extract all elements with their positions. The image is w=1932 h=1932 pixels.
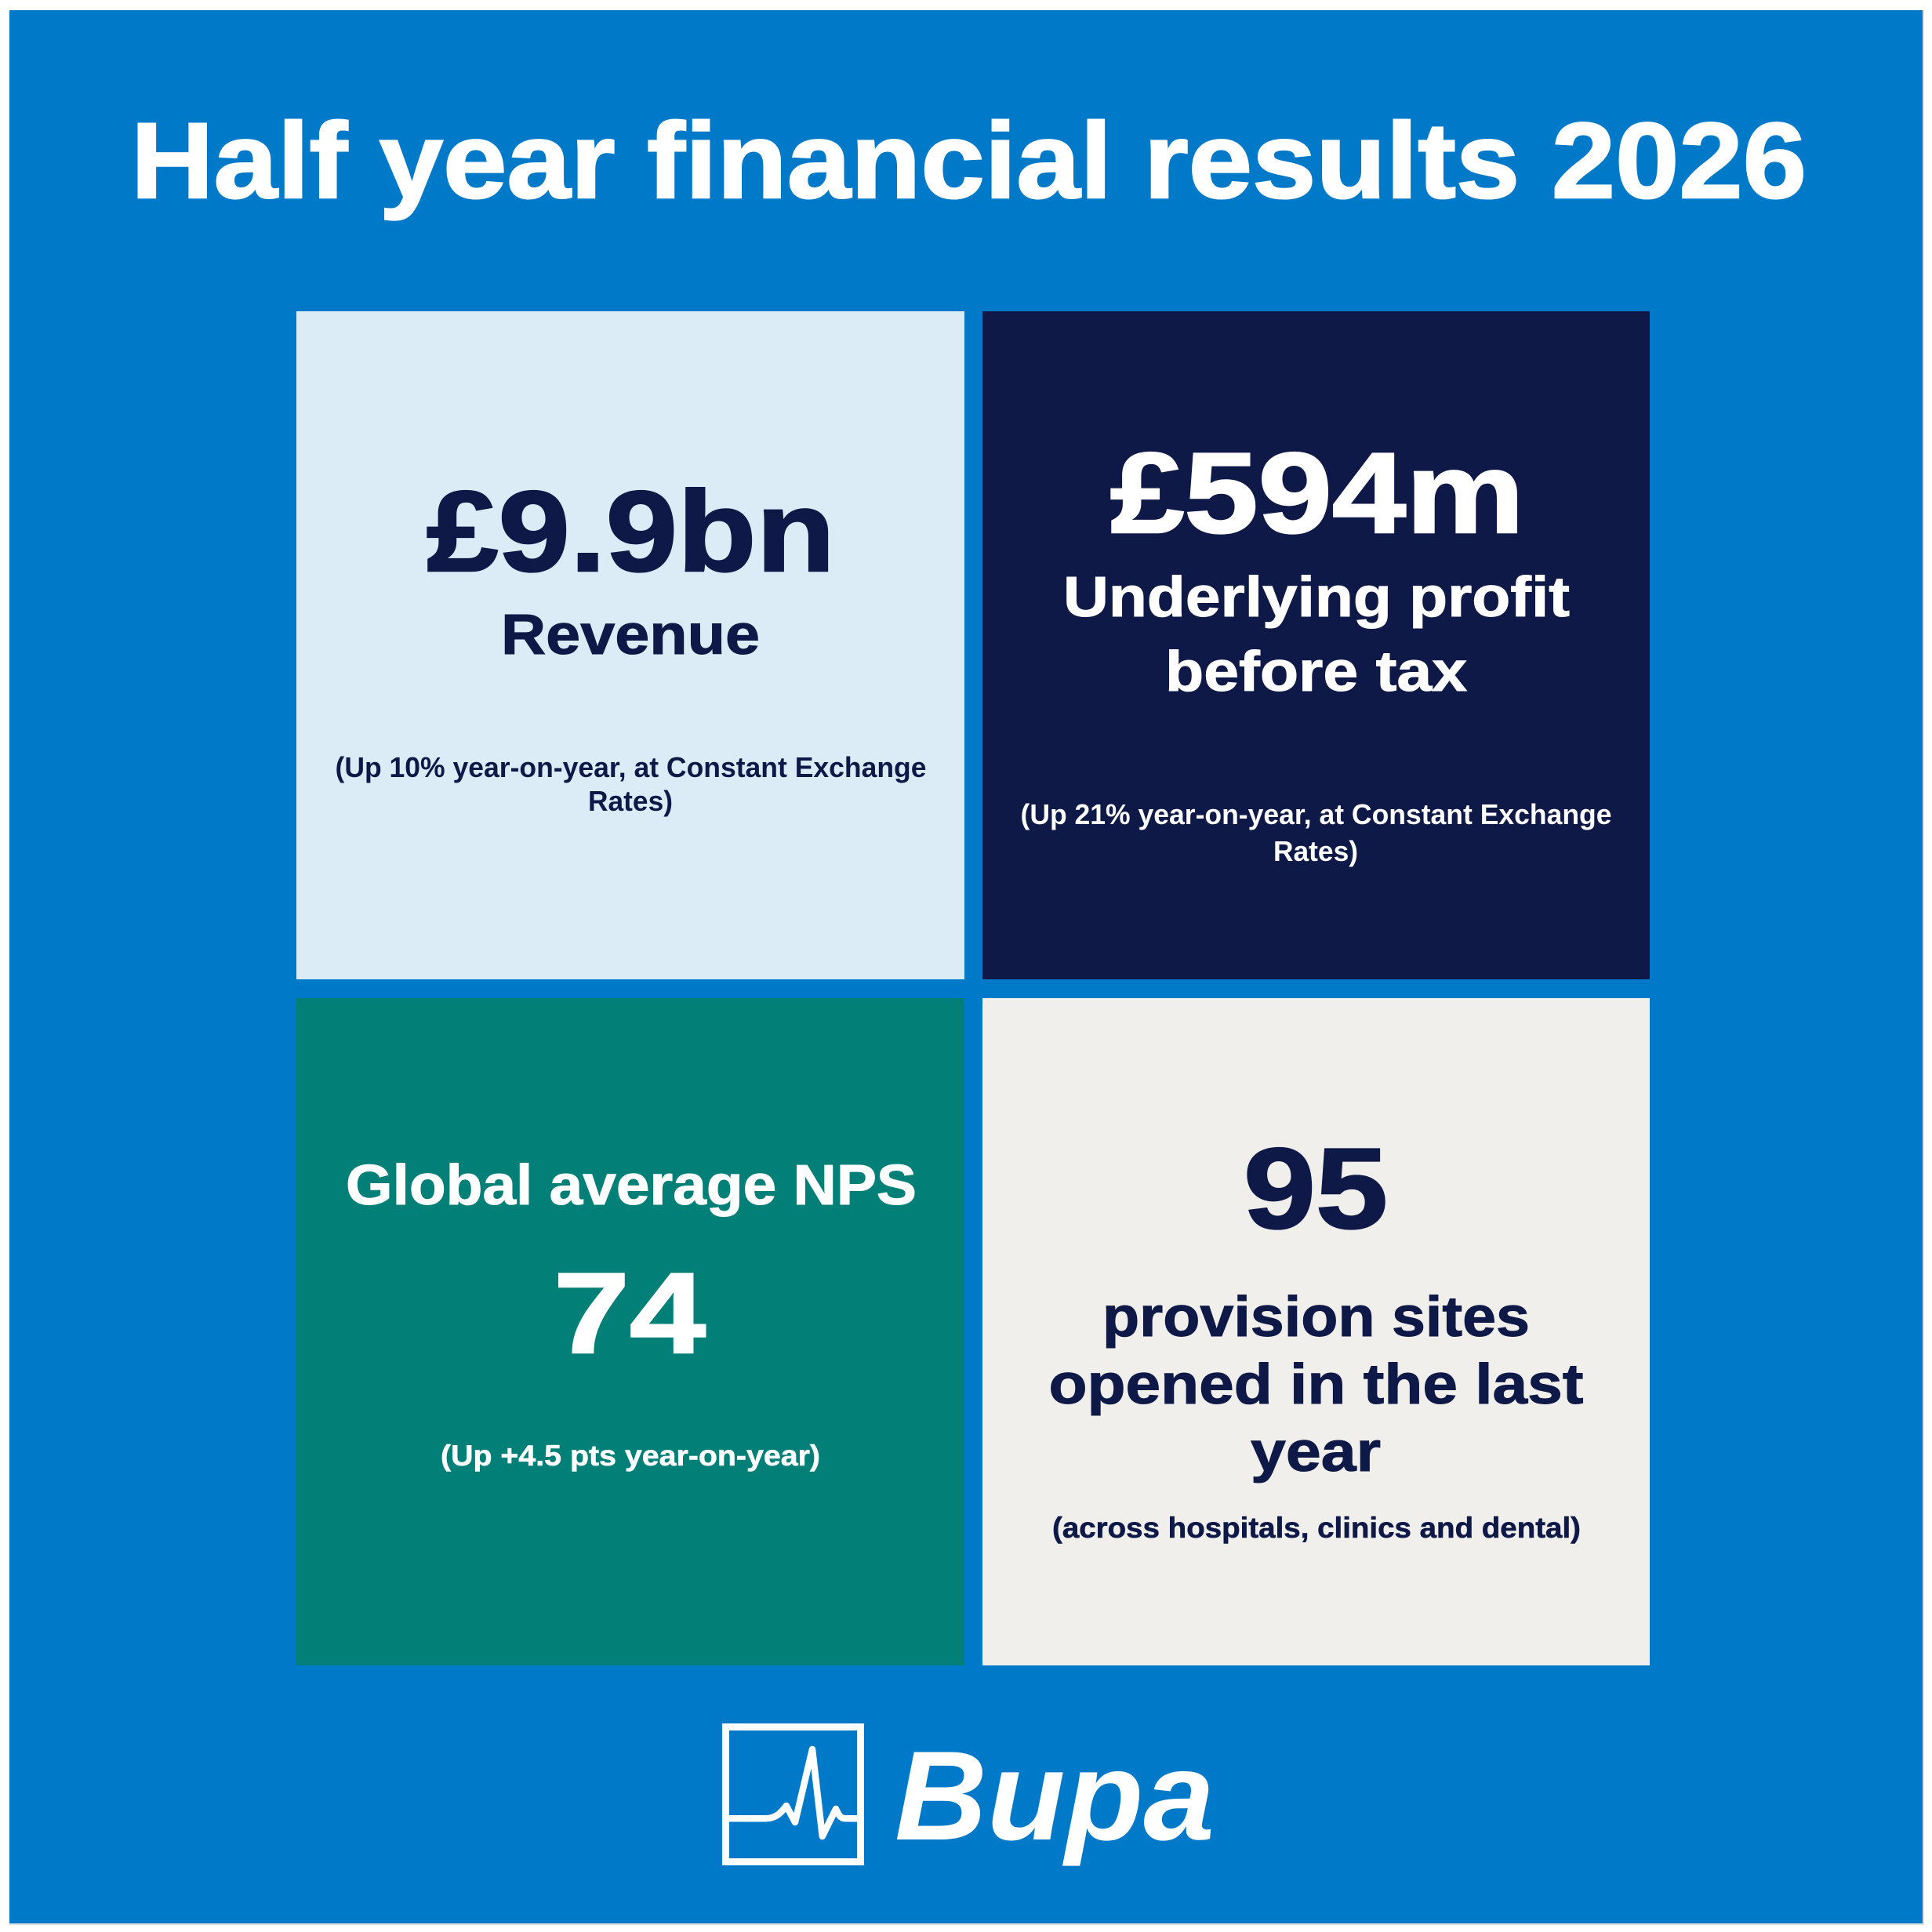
profit figure: £594m [1110,429,1524,557]
revenue note: (Up 10% year-on-year, at Constant Exchange [336,751,927,783]
revenue figure: £9.9bn [427,467,835,595]
NPS label: Global average NPS [346,1154,917,1217]
panel: underlying profit [982,311,1650,979]
revenue note [336,751,927,817]
logo: Bupa [726,1725,1215,1867]
sites label: opened in the last [1049,1353,1584,1416]
title: Half year financial results 2026 [131,101,1807,221]
profit note [1021,798,1612,867]
NPS figure: 74 [554,1249,706,1377]
sites label [1049,1286,1584,1484]
sites label: provision sites [1102,1286,1530,1349]
panel: revenue [296,311,964,979]
revenue note: Rates) [588,785,673,817]
profit label: Underlying profit [1063,566,1570,629]
icon: heartbeat box [726,1727,861,1861]
profit note: Rates) [1273,835,1358,867]
revenue label: Revenue [501,604,760,666]
sites figure: 95 [1244,1124,1388,1252]
sites label: year [1251,1421,1381,1484]
profit label: before tax [1165,641,1467,703]
wordmark: Bupa [895,1725,1215,1867]
profit label [1063,566,1570,703]
panel: NPS [296,998,964,1665]
sites note: (across hospitals, clinics and dental) [1052,1512,1581,1544]
profit note: (Up 21% year-on-year, at Constant Exchange [1021,798,1612,830]
NPS note: (Up +4.5 pts year-on-year) [441,1440,820,1472]
panel: provision sites [982,998,1650,1665]
